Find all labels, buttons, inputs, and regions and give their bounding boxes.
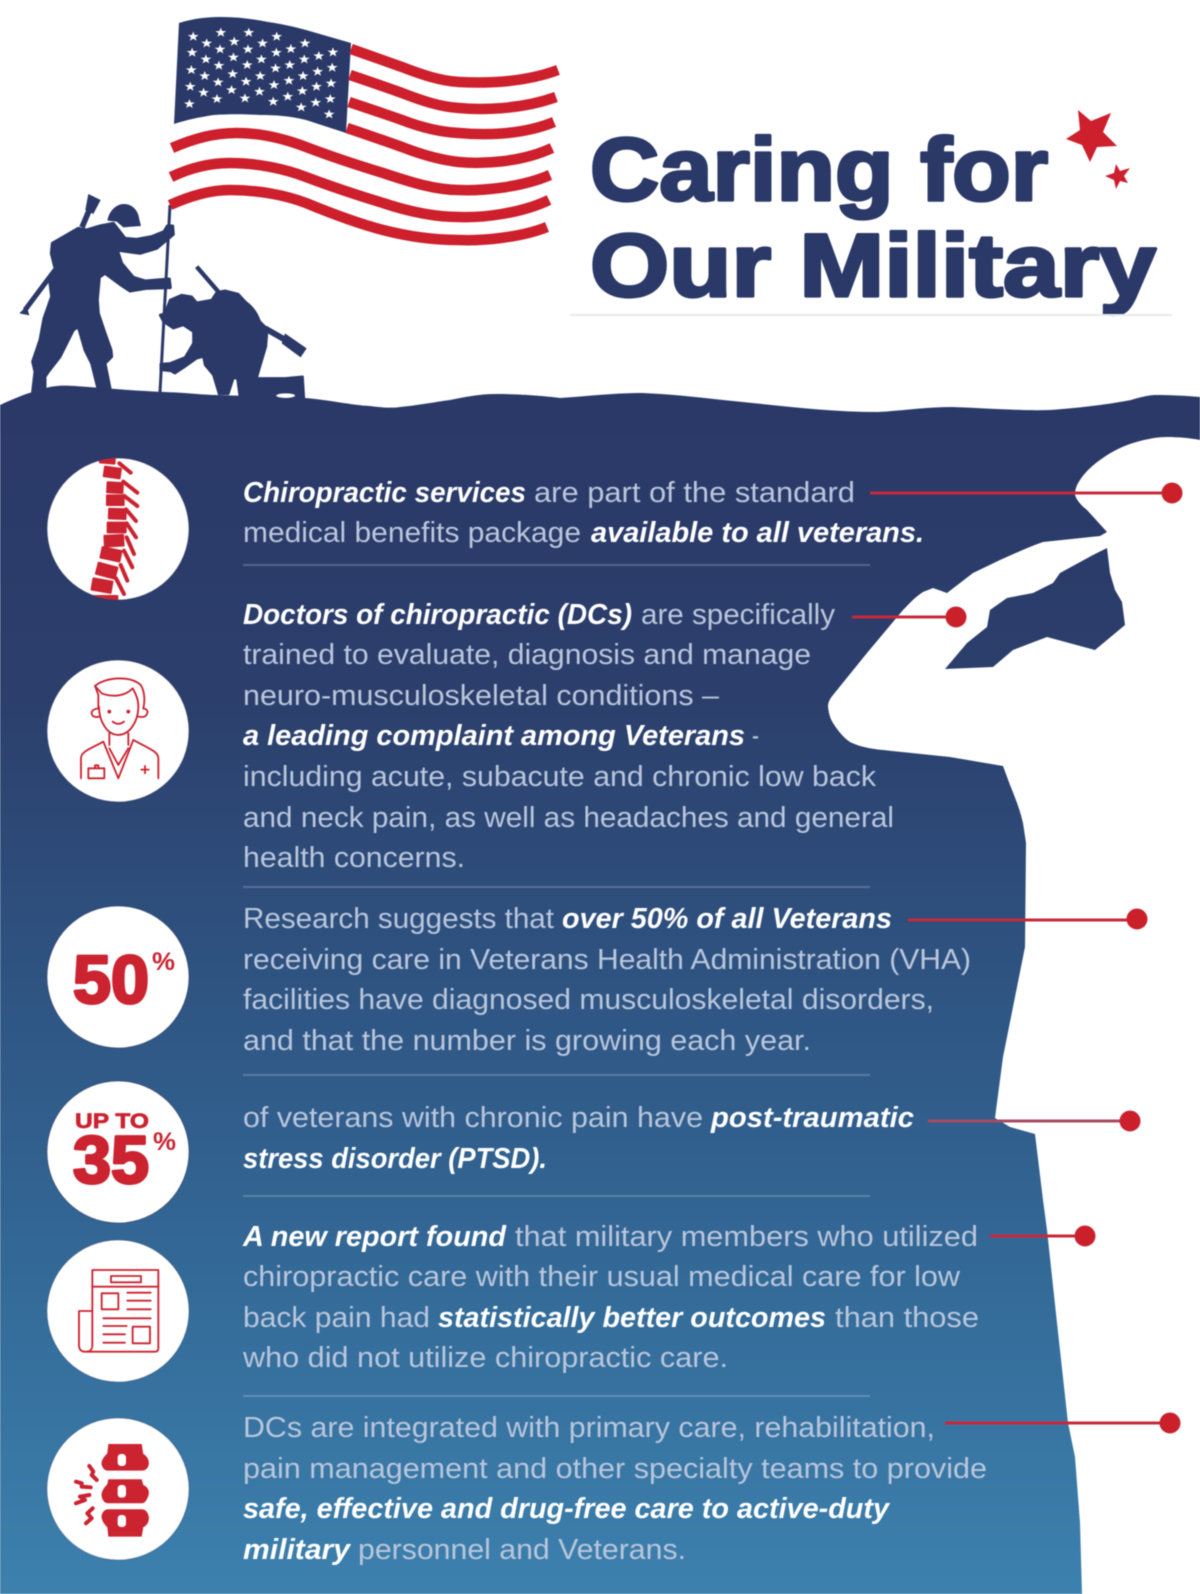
text block: over 50 percent of veterans (243, 903, 971, 1057)
title: Our Military (590, 215, 1157, 315)
text block: over 50 percent of veterans: over 50% of all Veterans (562, 903, 892, 935)
text block: new report: chiropractic care with their usual medical care for low (243, 1261, 961, 1293)
text block: doctors of chiropractic: health concerns. (243, 842, 465, 874)
text block: PTSD: post-traumatic (710, 1102, 914, 1134)
icon circle: up to 35 percent: 35 (73, 1123, 149, 1198)
text block: PTSD: of veterans with chronic pain have (243, 1102, 703, 1134)
icon circle: spine (47, 456, 189, 601)
icon circle: up to 35 percent: % (153, 1128, 176, 1156)
icon circle: 50 percent: % (152, 948, 175, 976)
text block: chiropractic services: available to all veterans. (591, 517, 924, 549)
text block: over 50 percent of veterans: facilities have diagnosed musculoskeletal disorders, (243, 984, 934, 1016)
text block: chiropractic services (243, 477, 924, 549)
callout lines and dots (852, 483, 1182, 1433)
text block: integrated care: personnel and Veterans. (358, 1534, 686, 1566)
text block: doctors of chiropractic: and neck pain, as well as headaches and general (243, 802, 894, 834)
title (590, 119, 1157, 315)
text block: new report: back pain had (243, 1302, 430, 1334)
text block: integrated care: DCs are integrated with primary care, rehabilitation, (243, 1412, 935, 1444)
icon circle: up to 35 percent: UP TO (75, 1110, 149, 1133)
text block: over 50 percent of veterans: and that the number is growing each year. (243, 1025, 811, 1057)
text block: integrated care: pain management and other specialty teams to provide (243, 1453, 987, 1485)
text block: new report: who did not utilize chiropractic care. (242, 1342, 728, 1374)
text block: new report: A new report found (242, 1221, 507, 1253)
text block: new report (242, 1221, 979, 1374)
icon circle: newspaper (47, 1240, 189, 1382)
text block: doctors of chiropractic: neuro-musculoskeletal conditions – (243, 680, 720, 712)
icon circle: vertebrae with pain bolts (47, 1418, 189, 1560)
panel: navy gradient ground and content area (0, 386, 1200, 1594)
icon circle: 50 percent: 50 (73, 942, 149, 1018)
text block: doctors of chiropractic: are specifically (641, 599, 836, 631)
text block: PTSD (243, 1102, 914, 1175)
text block: over 50 percent of veterans: receiving care in Veterans Health Administration (VHA) (243, 944, 971, 976)
flag stripes (170, 49, 558, 240)
text block: chiropractic services: are part of the standard (534, 477, 855, 509)
text block: doctors of chiropractic: Doctors of chiropractic (DCs) (243, 599, 632, 631)
text block: PTSD: stress disorder (PTSD). (243, 1143, 547, 1175)
text block: doctors of chiropractic: trained to evaluate, diagnosis and manage (243, 639, 811, 671)
icon circle: up to 35 percent (47, 1081, 189, 1223)
text block: integrated care: military (243, 1534, 352, 1566)
text block: new report: statistically better outcomes (438, 1302, 826, 1334)
flag canton (174, 17, 351, 133)
text block: chiropractic services: medical benefits package (243, 517, 581, 549)
title: Caring for (590, 119, 1048, 219)
saluting soldier silhouette (828, 437, 1200, 1594)
text block: doctors of chiropractic (243, 599, 894, 874)
text block: new report: that military members who utilized (515, 1221, 978, 1253)
text block: doctors of chiropractic: including acute, subacute and chronic low back (243, 761, 877, 793)
flag pole (160, 205, 170, 392)
icon: kneeling soldier silhouette (160, 267, 307, 398)
dividers (243, 565, 870, 1396)
flag stars (184, 28, 338, 118)
text block: new report: than those (835, 1302, 979, 1334)
icon: standing soldier silhouette (19, 194, 173, 392)
text block: chiropractic services: Chiropractic services (243, 477, 526, 509)
text block: integrated care: safe, effective and drug-free care to active-duty (243, 1493, 891, 1525)
icon circle: doctor (47, 660, 189, 802)
text block: integrated care (243, 1412, 987, 1566)
icon circle: 50 percent (47, 906, 189, 1048)
icon: red stars (1066, 110, 1130, 189)
text block: doctors of chiropractic: - (752, 720, 759, 752)
text block: doctors of chiropractic: a leading complaint among Veterans (243, 720, 745, 752)
icon: American flag (170, 17, 558, 240)
text block: over 50 percent of veterans: Research suggests that (243, 903, 554, 935)
